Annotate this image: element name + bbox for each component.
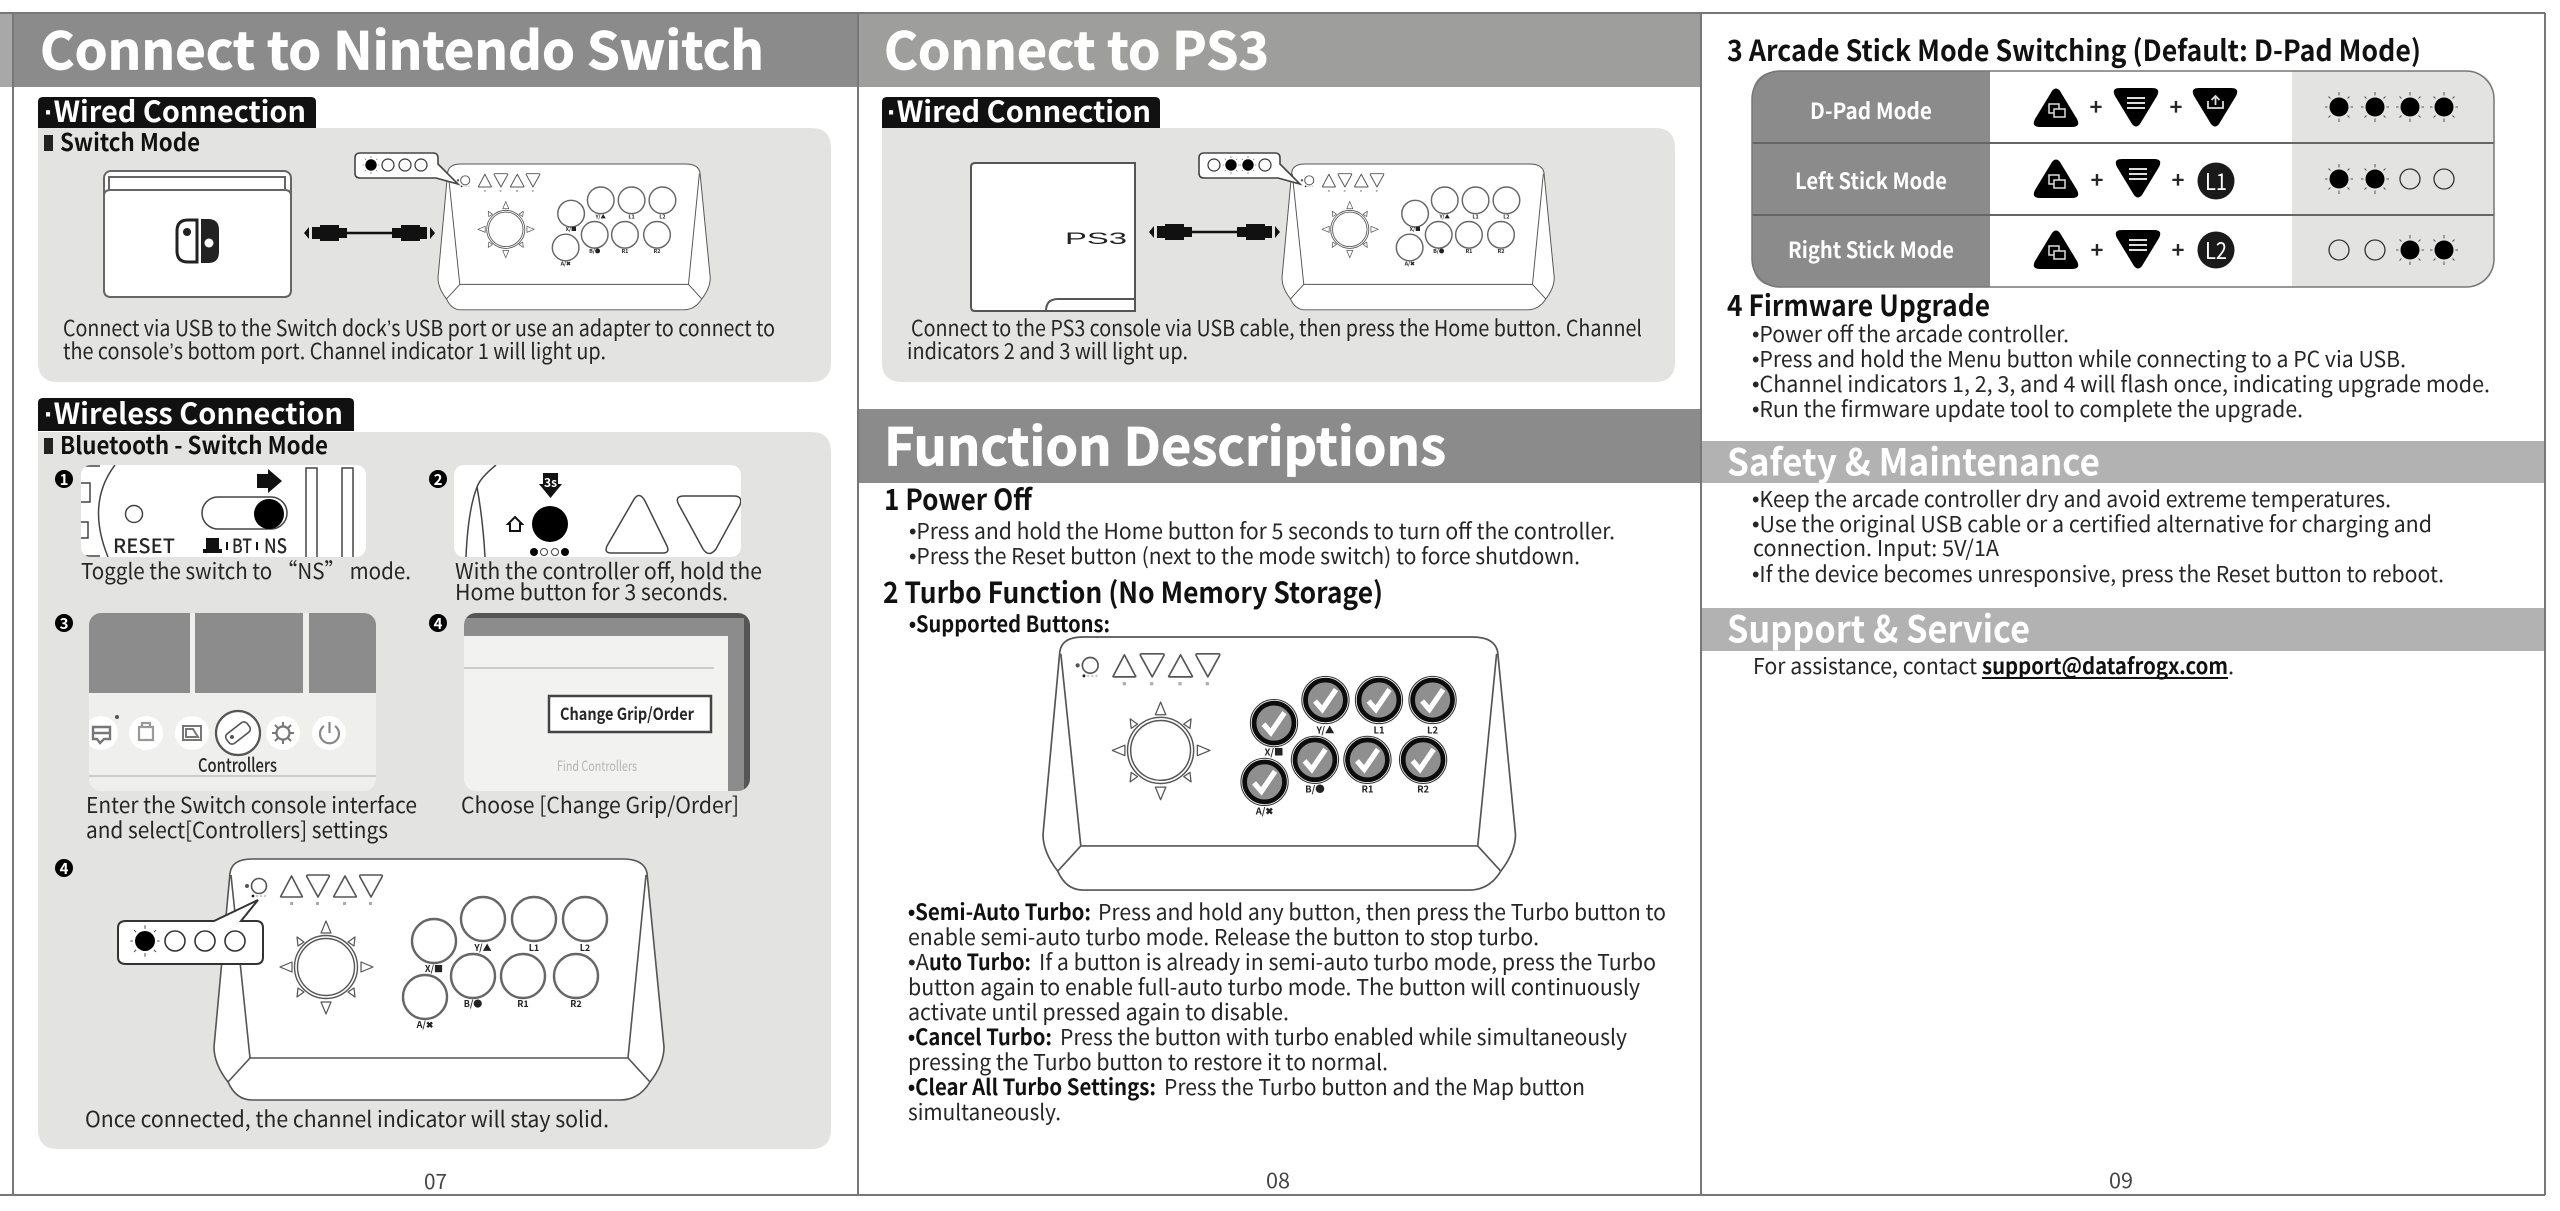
- text: turbo modes: •Semi-Auto Turbo:: [908, 895, 1091, 927]
- row: Right Stick Mode: L2: [2205, 232, 2227, 266]
- arcade stick with supported turbo buttons: L2: [1427, 723, 1438, 737]
- text: PS3 instructions: Connect to the PS3 console via USB cable, then press the Home button. Channel: [911, 311, 1642, 343]
- text: turbo modes: •A: [908, 945, 930, 977]
- arcade stick: B/●: [589, 247, 601, 255]
- arcade stick: A/✖: [1404, 260, 1415, 268]
- illustration: console home menu: Controllers: [198, 751, 277, 778]
- subheading: Bluetooth - Switch Mode: Bluetooth - Switch Mode: [60, 426, 328, 461]
- row: D-Pad Mode: +: [2090, 90, 2103, 122]
- row: D-Pad Mode: [1810, 88, 2458, 127]
- arcade stick with supported turbo buttons: R2: [1417, 781, 1430, 795]
- arcade stick with supported turbo buttons: X/■: [1264, 745, 1284, 759]
- header band: Function Descriptions: [858, 406, 1701, 483]
- text: turbo modes: If a button is already in semi-auto turbo mode, press the Turbo: [1039, 945, 1656, 977]
- arcade stick with supported turbo buttons: R1: [1361, 781, 1373, 795]
- caption: connected: Once connected, the channel indicator will stay solid.: [85, 1102, 609, 1134]
- callout: channel indicators 2 and 3: [1199, 153, 1300, 184]
- text: support contact: For assistance, contact: [1753, 649, 1977, 681]
- text: turbo modes: enable semi-auto turbo mode. Release the button to stop turbo.: [908, 920, 1539, 952]
- arcade stick: R1: [1465, 247, 1472, 255]
- band: Safety & Maintenance: Safety & Maintenance: [1727, 432, 2100, 486]
- section 4: Firmware Upgrade: 4 Firmware Upgrade: [1727, 283, 1990, 325]
- arcade stick: A/✖: [560, 260, 571, 268]
- arcade stick with supported turbo buttons: Y/▲: [1315, 723, 1335, 737]
- arcade stick large: B/●: [464, 997, 482, 1010]
- text: turbo modes: simultaneously.: [908, 1095, 1061, 1127]
- row: Left Stick Mode: +: [2091, 163, 2104, 195]
- text: support contact: [1753, 649, 2234, 681]
- header band: Connect to PS3: Connect to PS3: [884, 10, 1269, 84]
- icon: PS3 console: [971, 163, 1135, 311]
- page number 09: 09: [2109, 1165, 2133, 1195]
- section 1: Power Off: [884, 477, 1615, 571]
- band: Safety & Maintenance: [1701, 432, 2545, 486]
- text: safety: •If the device becomes unresponsive, press the Reset button to reboot.: [1752, 557, 2444, 589]
- step badge 4: 4: [434, 613, 443, 634]
- title: Connect to Nintendo Switch: [40, 10, 764, 84]
- arcade stick: X/■: [1410, 225, 1421, 233]
- section 4: Firmware Upgrade: •Press and hold the Menu button while connecting to a PC via USB.: [1752, 342, 2406, 374]
- text: safety: [1752, 482, 2444, 589]
- panel: wireless Bluetooth mode: [38, 426, 831, 1149]
- illustration: mode switch: [81, 465, 366, 559]
- icon: USB cable: [304, 225, 435, 241]
- arcade stick: B/●: [1433, 247, 1445, 255]
- page number 07: 07: [424, 1166, 447, 1196]
- step badge 1: [55, 469, 73, 490]
- row: Left Stick Mode: Left Stick Mode: [1795, 164, 1947, 196]
- icon: PS3 console: PS3: [1065, 229, 1127, 248]
- text: wired instructions: the console’s bottom port. Channel indicator 1 will light up.: [63, 334, 606, 366]
- arcade stick: R2: [1498, 247, 1504, 255]
- arcade stick large: A/✖: [416, 1018, 434, 1031]
- header band: Connect to Nintendo Switch: [0, 10, 858, 87]
- caption step 2: Home button for 3 seconds.: [455, 575, 728, 607]
- text: turbo modes: Press and hold any button, then press the Turbo button to: [1098, 895, 1666, 927]
- band: Support & Service: [1701, 600, 2545, 654]
- icon: Switch logo: [177, 219, 219, 263]
- illustration: mode switch: NS: [264, 530, 287, 559]
- caption step 3: Enter the Switch console interface: [86, 788, 417, 820]
- subheading: Switch Mode: Switch Mode: [60, 123, 200, 158]
- page number 08: 08: [1266, 1165, 1290, 1195]
- text: turbo modes: activate until pressed again to disable.: [908, 995, 1289, 1027]
- row: D-Pad Mode: D-Pad Mode: [1810, 94, 1932, 126]
- arcade stick: R2: [654, 247, 660, 255]
- step badge 4: [429, 613, 447, 634]
- band: Support & Service: Support & Service: [1727, 600, 2030, 654]
- text: turbo modes: [908, 895, 1666, 1127]
- row: Left Stick Mode: L1: [2205, 163, 2227, 197]
- text: turbo modes: Press the Turbo button and the Map button: [1164, 1070, 1585, 1102]
- illustration: mode switch: RESET: [113, 530, 175, 559]
- step badge 4 (second): [55, 858, 73, 879]
- arcade stick: Y/▲: [595, 212, 606, 220]
- tab: Wireless Connection: ·Wireless Connection: [44, 391, 343, 433]
- text: turbo modes: •Clear All Turbo Settings:: [908, 1070, 1156, 1102]
- arcade stick: X/■: [566, 225, 577, 233]
- section 4: Firmware Upgrade: •Channel indicators 1, 2, 3, and 4 will flash once, indicating upgrade mode.: [1752, 367, 2490, 399]
- section 1: Power Off: •Press and hold the Home button for 5 seconds to turn off the controller.: [909, 514, 1615, 546]
- header band: Function Descriptions: Function Descriptions: [884, 406, 1446, 480]
- arcade stick large: L1: [529, 941, 539, 954]
- illustration: hold Home button: [454, 465, 741, 557]
- row: Right Stick Mode: [1788, 230, 2458, 269]
- text: wired instructions: Connect via USB to the Switch dock’s USB port or use an adapter to connect to: [63, 311, 775, 343]
- panel: wired Switch mode: [38, 123, 831, 382]
- arcade stick with supported turbo buttons: L1: [1373, 723, 1385, 737]
- text: turbo modes: pressing the Turbo button to restore it to normal.: [908, 1045, 1388, 1077]
- table: stick modes: [1752, 71, 2494, 287]
- row: Left Stick Mode: [1795, 159, 2454, 200]
- header band: Connect to PS3: [858, 10, 1701, 87]
- section 1: Power Off: •Press the Reset button (next to the mode switch) to force shutdown.: [909, 539, 1580, 571]
- text: turbo modes: •Cancel Turbo:: [908, 1020, 1052, 1052]
- row: Right Stick Mode: +: [2091, 233, 2104, 265]
- text: safety: •Keep the arcade controller dry and avoid extreme temperatures.: [1752, 482, 2391, 514]
- step badge 2: [429, 469, 447, 490]
- text: support contact: support@datafrogx.com: [1982, 649, 2228, 681]
- arcade stick large: R1: [517, 997, 529, 1010]
- tab: Wired Connection PS3: ·Wired Connection: [887, 89, 1151, 131]
- text: turbo modes: button again to enable full-auto turbo mode. The button will continuously: [908, 970, 1641, 1002]
- arcade stick: Y/▲: [1439, 212, 1450, 220]
- text: safety: •Use the original USB cable or a certified alternative for charging and: [1752, 507, 2432, 539]
- arcade stick large: L2: [580, 941, 590, 954]
- callout: channel indicator large: [118, 900, 263, 964]
- caption step 3: [86, 788, 417, 845]
- section 2: Turbo heading: •Supported Buttons:: [909, 607, 1110, 639]
- text: safety: connection. Input: 5V/1A: [1753, 531, 2000, 563]
- section 4: Firmware Upgrade: •Power off the arcade controller.: [1752, 317, 2069, 349]
- section 2: Turbo heading: [883, 570, 1383, 639]
- arcade stick: [438, 164, 710, 310]
- icon: Switch dock: [104, 171, 291, 297]
- caption step 2: [455, 554, 762, 607]
- icon: USB cable: [1149, 224, 1280, 240]
- step badge 1: 1: [60, 469, 68, 490]
- text: wired instructions: [63, 311, 775, 366]
- step badge 4 (second): 4: [60, 858, 69, 879]
- panel: PS3 wired: [882, 128, 1675, 382]
- section 2: Turbo heading: 2 Turbo Function (No Memory Storage): [883, 570, 1383, 612]
- arcade stick large: R2: [570, 997, 582, 1010]
- tab: Wired Connection: ·Wired Connection: [44, 89, 306, 131]
- text: PS3 instructions: [907, 311, 1642, 366]
- illustration: Change Grip/Order screen: Find Controllers: [557, 756, 637, 776]
- arcade stick: [1282, 164, 1554, 310]
- text: turbo modes: uto Turbo:: [929, 945, 1031, 977]
- illustration: Change Grip/Order screen: [464, 613, 750, 791]
- arcade stick large: X/■: [425, 962, 443, 975]
- arcade stick large: [214, 859, 664, 1100]
- arcade stick: L1: [628, 212, 635, 220]
- arcade stick: L1: [1472, 212, 1479, 220]
- caption step 2: With the controller off, hold the: [455, 554, 762, 586]
- arcade stick: L2: [659, 212, 666, 220]
- arcade stick with supported turbo buttons: [1043, 637, 1516, 890]
- caption step 4: Choose [Change Grip/Order]: [461, 788, 739, 820]
- arcade stick with supported turbo buttons: B/●: [1305, 781, 1325, 795]
- heading: Arcade Stick Mode Switching: 3 Arcade Stick Mode Switching (Default: D-Pad Mode): [1727, 28, 2421, 70]
- step badge 2: 2: [434, 469, 443, 490]
- section 4: Firmware Upgrade: [1727, 283, 2490, 424]
- text: support contact: .: [2228, 649, 2234, 681]
- row: Right Stick Mode: +: [2172, 233, 2185, 265]
- caption step 3: and select[Controllers] settings: [86, 813, 388, 845]
- row: Left Stick Mode: +: [2172, 163, 2185, 195]
- text: turbo modes: Press the button with turbo enabled while simultaneously: [1060, 1020, 1628, 1052]
- callout: channel indicator 1: [355, 153, 458, 184]
- illustration: console home menu: [84, 613, 376, 791]
- illustration: hold Home button: 3s: [544, 474, 557, 491]
- arcade stick with supported turbo buttons: A/✖: [1255, 803, 1273, 817]
- arcade stick: L2: [1503, 212, 1510, 220]
- arcade stick large: Y/▲: [473, 941, 492, 954]
- row: Right Stick Mode: Right Stick Mode: [1788, 233, 1954, 265]
- section 4: Firmware Upgrade: •Run the firmware update tool to complete the upgrade.: [1752, 392, 2303, 424]
- section 1: Power Off: 1 Power Off: [884, 477, 1033, 519]
- caption step 1: Toggle the switch to “NS” mode.: [81, 554, 411, 586]
- row: D-Pad Mode: +: [2170, 90, 2183, 122]
- step badge 3: [55, 613, 73, 634]
- illustration: mode switch: BT: [232, 530, 252, 559]
- arcade stick: R1: [621, 247, 628, 255]
- step badge 3: 3: [60, 613, 68, 634]
- illustration: Change Grip/Order screen: Change Grip/Order: [560, 700, 694, 725]
- text: PS3 instructions: indicators 2 and 3 will light up.: [907, 334, 1188, 366]
